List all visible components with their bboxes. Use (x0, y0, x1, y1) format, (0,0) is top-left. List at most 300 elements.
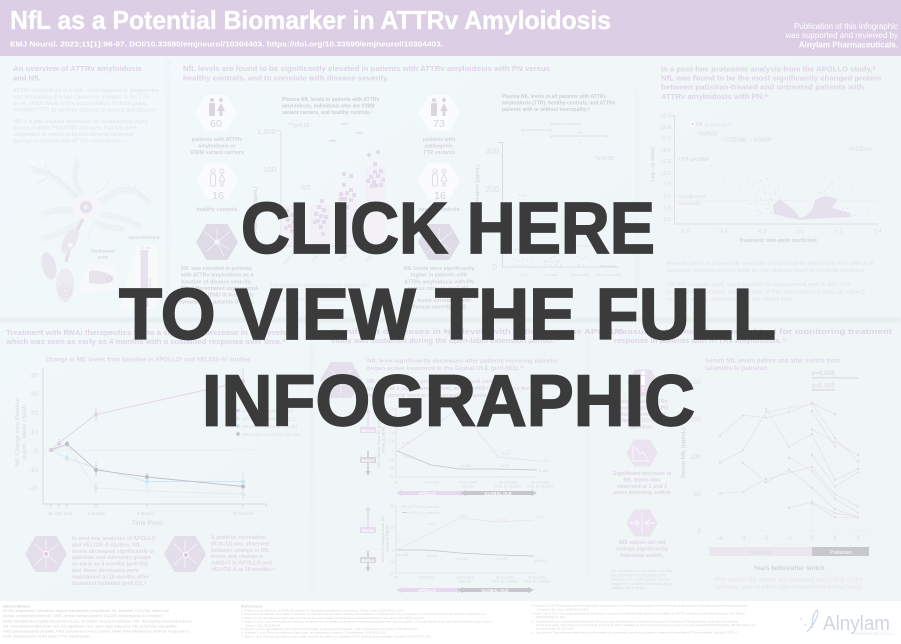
stat: patients who switched: 1 (641, 387, 645, 394)
volcano plot: N-CDase (850, 146, 872, 152)
volcano plot: 0.2 (835, 229, 843, 235)
volcano plot: 12.5 (661, 159, 671, 165)
line chart: NfL change from BL: 42 months (531, 480, 549, 484)
line chart: serum NfL before and after switch: Years before/after switch (753, 566, 825, 572)
stat: patients who switched: amyloidosis with PN (616, 405, 668, 411)
stat: patients who switched: who switched from (617, 412, 667, 418)
text: OLE finding: began active treatment in the Global OLE (p<0.001).¹⁰ (367, 365, 525, 372)
overlay call to action (119, 188, 776, 442)
volcano plot: -Log₁₀ (p value) (650, 147, 656, 183)
scatter chart: plasma NfL by group: 1,000 (257, 127, 276, 136)
line chart: NfL change from baseline: 18 Months (233, 511, 254, 516)
scatter chart: plasma NfL TTR vs controls: TTR (519, 273, 527, 277)
line chart: NfL change from baseline: 30 (31, 391, 38, 398)
text: post-hoc analyses: maintained to 18 months after (72, 574, 150, 580)
scatter chart: plasma NfL by group: 100 (263, 165, 276, 174)
text: post-hoc analyses: and HELIOS-A studies, NfL (72, 542, 142, 548)
line chart: mNIS+7 change from BL: 42 months (528, 576, 546, 580)
panel: monitoring treatment response: tafamidis to patisiran. (705, 365, 769, 372)
panel: RNAi therapeutics: Change in NfL levels from baseline in APOLLO¹ and HELIOS-A² studies (46, 356, 251, 364)
text: limitations: The limitations of this study included (611, 569, 672, 573)
legend: HELIOS-A patisiran (N=36) (242, 424, 298, 429)
neurofilament inset (120, 245, 157, 309)
stat: 60 patients: 60 (210, 118, 222, 130)
references: 5. Gaetani L et al. Neurofilament light chain as a biomarker in neurological disorders. J Neurol Neurosurg Psychiatry. 2019;90:870-81. (241, 627, 418, 631)
line chart: NfL change from baseline: D21 (55, 511, 64, 516)
text: OLE finding: overall clinical burden of neuropathic impairment. (367, 393, 500, 399)
scatter chart: plasma NfL by group: PND II (364, 251, 376, 264)
text: OLE finding (367, 358, 559, 399)
line chart: serum NfL before and after switch: Patisiran (830, 550, 852, 556)
text: NfL elevation finding: symptomatic patients (PND I). (179, 299, 255, 305)
line chart: mNIS+7 change from BL: -10 (388, 560, 394, 564)
text: significantly higher finding: NfL levels correlated with (407, 298, 471, 304)
body text: suggested to reflect active/continuing neuronal (13, 132, 133, 138)
volcano plot: EDA2R (754, 138, 772, 144)
volcano explanation: patisiran treatment over time on the plasma level of multiple proteins. (667, 268, 866, 274)
scatter chart: plasma NfL by group: Control (282, 252, 295, 266)
worse/better arrows top (360, 408, 376, 476)
text: post-hoc analyses: and these decreases were (72, 568, 139, 574)
volcano plot: RSPO3 (699, 132, 717, 138)
line chart: serum NfL before and after switch: 150 (690, 416, 701, 424)
icon: neuron illustration: 10 nm (140, 246, 150, 250)
text: significant decrease: NfL levels was (623, 477, 661, 483)
icon: neuron illustration: Myelinated (91, 248, 115, 254)
icon: neuron hexagon 4 (164, 536, 206, 572)
text: limitations: longer-term studies are necessary to (611, 582, 673, 586)
line chart: mNIS+7 change from BL: -20 (388, 572, 394, 576)
icon: neuron hexagon 2 (418, 224, 460, 260)
text: limitations: validate the findings. (611, 586, 646, 590)
line chart: serum NfL before and after switch: Pre-switch NfL levels are depicted according to the (715, 576, 864, 584)
text: positive correlation: HELIOS-A at 18 months.⁹ (211, 567, 276, 573)
line chart: NfL change from BL: NfL change from BL (pg/mL), (376, 413, 381, 467)
line chart: serum NfL before and after switch: 0 (810, 535, 814, 542)
line chart: serum NfL before and after switch: 100 (690, 454, 701, 461)
volcano plot: Significance (678, 194, 707, 200)
legend: APOLLO-placebo (N=47) (242, 408, 294, 414)
stat: 73 patients (418, 95, 460, 156)
scatter chart: plasma NfL TTR vs controls: * (564, 119, 566, 125)
scatter chart: plasma NfL by group: amyloidosis, individuals who are V30M (282, 104, 375, 110)
chart title: Serum NfL levels before and after switch from (705, 358, 840, 364)
line chart: NfL change from BL: 30 months (499, 480, 517, 484)
abbreviations: mNIS: Modified Neuropathy Impairment Score; N-CDase: neutral ceramidase; NIS: Neuropathy Impairment Score; (3, 619, 193, 623)
text: NfL elevation finding: with ATTRv amyloidosis as a (180, 273, 253, 279)
volcano plot: threshold (678, 201, 700, 207)
references: 7. Maia LF et al. Plasma neurofilament light chain: an early biomarker for hereditary ATTR amyloid polyneuropathy. Amyloid. 2020;27(2):97-102. (241, 634, 432, 638)
line chart: mNIS+7 change from BL: OLE 12 months (492, 580, 518, 584)
line chart: NfL change from BL: n=111 (405, 455, 415, 459)
volcano explanation: and the x-axis demonstrates the effect size. (667, 297, 794, 303)
scatter chart: plasma NfL TTR vs controls (475, 94, 622, 277)
abbreviations: Abbreviations (3, 604, 30, 608)
icon: neuron hexagon 3 (25, 536, 67, 572)
line chart: serum NfL before and after switch: -1 (786, 535, 792, 542)
body text: NfL is a well-studied biomarker for neuroaxonal injury (13, 119, 149, 125)
line chart: serum NfL before and after switch: p=0.001 (812, 382, 835, 390)
line chart: serum NfL before and after switch: Tafamidis (748, 550, 772, 556)
references: J Peripher Nerv Syst. 2019;24(4):314-9. (536, 607, 589, 611)
text: significant decrease: years following switch (613, 490, 671, 496)
heading: Significant decreases in NfL levels with patisiran in the APOLLO (331, 327, 624, 336)
line chart: NfL change from baseline: 4 Months (87, 511, 106, 516)
volcano plot: 20.0 (661, 125, 671, 131)
stat: 16 controls: 16 (434, 190, 446, 202)
heading: NfL levels are found to be significantly elevated in patients with ATTRv amyloidosis with PN versus (183, 64, 550, 73)
stat: 16 healthy controls: healthy controls (197, 207, 238, 213)
stat: patients who switched (616, 370, 668, 431)
scatter chart: plasma NfL TTR vs controls: NS (577, 131, 583, 135)
body text (13, 88, 163, 144)
line chart: NfL change from baseline: 10 (31, 429, 38, 436)
line chart: mNIS+7 change from BL: 40 (390, 504, 394, 508)
text: significant decrease: observed at 1 and 2 (617, 484, 667, 490)
panel: overview of ATTRv amyloidosis (13, 64, 163, 309)
heading: Measuring NfL may be a useful tool for monitoring treatment (614, 327, 893, 336)
volcano plot: 17.5 (661, 136, 671, 142)
references: 6. Thebault S et al. Blood neurofilament light chain: the neurologist's troponin? Biomedicines. 2020;8(11):523. (241, 631, 386, 635)
line chart: NfL change from BL: n=111 (461, 464, 471, 468)
line chart: NfL change from BL: -30 (388, 475, 394, 479)
body text: across multiple PNS/CNS diseases, that has been (13, 126, 138, 132)
logo: Alnylam (800, 610, 893, 636)
volcano plot: CCDC80 (725, 138, 746, 144)
references: 10. Polydefkis M et al. Neurofilament light chain (NfL) as a potential biomarker of treatment response in hereditary ATTR amyloidosis: data from the patisiran (531, 620, 739, 624)
line chart: NfL change from baseline: 0 (34, 448, 38, 455)
line chart: mNIS+7 change from BL: n=141 (427, 554, 438, 558)
text: NIS values: NIS values did not (619, 540, 665, 546)
line chart: serum NfL before and after switch: 1 (833, 535, 837, 542)
abbreviations (3, 604, 193, 639)
references (241, 604, 756, 638)
body text: and debilitating disease caused by variants in the TTR (13, 94, 150, 100)
line chart: serum NfL before and after switch: 50 (694, 491, 701, 498)
line chart: NfL change from BL: OLE 12 months (495, 484, 521, 488)
band arrows top: GLOBAL OLE (484, 491, 512, 496)
line chart: mNIS+7 change from BL: mean (± SEM) (384, 525, 390, 552)
line chart: NfL change from BL: n=67 (402, 441, 411, 445)
line chart: NfL change from BL: BL (395, 480, 399, 484)
line chart: mNIS+7 change from BL: OLE BL (458, 580, 472, 584)
header band (0, 0, 901, 56)
text: post-hoc analyses: as early as 4 months (p<0.05), (72, 562, 149, 568)
text: NfL elevation finding: NfL differentiated asymptomat- (181, 286, 259, 292)
scatter chart: plasma NfL by group: score of 3. (270, 290, 293, 296)
volcano explanation (667, 261, 874, 303)
panel: NfL levels elevated with PN (179, 64, 622, 311)
text: post-hoc analyses: levels decreased significantly in (72, 549, 154, 555)
overlay call to action: CLICK HERE (241, 188, 655, 269)
sponsor note: Publication of this infographic (794, 22, 898, 31)
icon: compress hexagon (626, 510, 658, 536)
worse/better arrows bottom: Better (362, 558, 375, 563)
stat: patients who switched: tafamidis (20 mg) to (617, 418, 668, 424)
text: significantly higher finding: versus controls (p<0.05). (408, 286, 471, 292)
myelinated axon inset (75, 262, 117, 295)
scatter chart: plasma NfL by group: *** (329, 140, 337, 146)
scatter chart: plasma NfL by group: NS (301, 185, 311, 192)
worse/better arrows top: Better (362, 458, 375, 463)
line chart: serum NfL before and after switch: Serum NfL (pg/mL) (681, 428, 687, 478)
scatter chart: plasma NfL by group: PND 0 (310, 250, 322, 264)
scatter chart: plasma NfL TTR vs controls: patients with or without neuropathy.⁸ (502, 107, 591, 113)
line chart: mNIS+7 change from BL: 9 months (419, 576, 435, 580)
worse/better arrows top: Worse (361, 428, 375, 433)
volcano plot: Treatment: time-point coefficient (739, 238, 817, 244)
line chart: mNIS+7 change from BL: APOLLO-placebo (408, 504, 440, 509)
worse/better arrows bottom: Worse (361, 528, 375, 533)
stat: 16 controls (418, 163, 460, 213)
band arrows bottom: APOLLO (418, 588, 436, 593)
heading: In a post-hoc proteomic analysis from the APOLLO study,⁹ (661, 64, 876, 74)
references: Neurol. 2021;20(1):49-59. (246, 623, 281, 627)
references: Last accessed: 20 July 2023. (536, 626, 575, 630)
line chart: NfL change from baseline (15, 368, 301, 527)
volcano plot: 2.5 (664, 206, 671, 212)
line chart: mNIS+7 change from BL: OLE 24 months (524, 580, 550, 584)
scatter chart: plasma NfL TTR vs controls: Controls (544, 273, 558, 277)
panel: proteomic analysis: between patisiran-treated and untreated patients with (661, 82, 864, 92)
line chart: mNIS+7 change from BL: n=51 (458, 514, 467, 518)
line chart: mNIS+7 change from BL: n=39 (498, 518, 507, 522)
volcano plot: 0.0 (664, 217, 671, 223)
line chart: mNIS+7 change from BL: 30 months (496, 576, 514, 580)
line chart: NfL change from baseline: (pg/mL; Mean ±SEM) (22, 404, 28, 460)
scatter chart: plasma NfL TTR vs controls: amyloidosis (TTR), healthy controls, and ATTRv (502, 100, 616, 106)
band arrows top (396, 490, 537, 496)
references: 1. Adams D et al. Patisiran, an RNAi therapeutic, for hereditary transthyretin amyloidosis. N Engl J Med. 2018;379(1):11-21. (241, 608, 405, 612)
line chart: mNIS+7 change from BL (380, 504, 550, 584)
scatter chart: plasma NfL by group: ***p<0.05 (288, 123, 309, 129)
scatter chart: plasma NfL TTR vs controls: Neuropathy (570, 273, 590, 277)
references: global OLE study. AAN Virtual Annual Meeting, 17-22 April, 2021. Available at: https://capella.alnylam.com/wp-content/uploads/2021/04/Polydefkis_NfL-Biomarker.pdf. (536, 623, 756, 627)
line chart: serum NfL before and after switch: 200 (690, 379, 701, 386)
volcano plot: -0.2 (758, 229, 767, 235)
line chart: serum NfL before and after switch (681, 370, 872, 591)
title: NfL as a Potential Biomarker in ATTRv Amyloidosis (10, 5, 611, 35)
scatter chart: plasma NfL by group (253, 97, 385, 303)
scatter chart: plasma NfL by group: PND I (339, 250, 350, 263)
line chart: mNIS+7 change from BL: n=100 (535, 559, 546, 563)
logo: Alnylam: PHARMACEUTICALS (855, 632, 893, 636)
line chart: NfL change from baseline: -20 (28, 485, 38, 492)
line chart: NfL change from BL: n=74 (501, 464, 510, 468)
abbreviations: NfL: neurofilament light chain; NS: not significant; OLE: open-label extension; PN: peripheral neuropathy; (3, 624, 177, 628)
references: 11. Sato M et al. Neurofilament light chain as a biomarker for monitoring response to change in treatment in hereditary ATTR amyloidosis. Amyloid. 2023:1-2. (531, 630, 739, 634)
body text: damage in patients with ATTRv amyloidosis.³˒⁵˒⁶ (13, 138, 131, 144)
line chart: NfL change from BL: n=26 (501, 452, 510, 456)
panel: overview of ATTRv amyloidosis: and NfL (13, 74, 41, 82)
icon: neuron illustration: 60 nm (148, 278, 152, 288)
heading: An overview of ATTRv amyloidosis (13, 64, 142, 73)
abbreviations: domain-containing protein 80; CNS: central nervous system; EDA2R: ectodysplasin A2 receptor; (3, 614, 163, 618)
stat: 60 patients: amyloidosis or (198, 144, 236, 150)
references: 4. Adams D et al. Long-term safety and efficacy of patisiran for hereditary transthyretin-mediated amyloidosis with polyneuropathy: 12-month results of an open-label extension study. Lancet (241, 620, 491, 624)
line chart: serum NfL before and after switch: -3 (740, 535, 746, 542)
stat: 60 patients: V30M variant carriers (190, 150, 244, 156)
line chart: mNIS+7 change from BL: 18 months (456, 576, 474, 580)
panel: NfL levels elevated with PN: healthy controls, and to correlate with disease severity. (183, 74, 389, 82)
scatter chart: plasma NfL TTR vs controls: 0 (493, 263, 498, 272)
text: post-hoc analyses: treatment initiation (p<0.01).⁹ (72, 581, 147, 587)
line chart: NfL change from BL: OLE BL (461, 484, 475, 488)
volcano plot: 5.0 (664, 194, 671, 200)
volcano plot: 15.0 (661, 148, 671, 154)
volcano plot: NT-proBNP (682, 157, 710, 163)
icon: neuron illustration (30, 157, 160, 309)
line chart: mNIS+7 change from BL: n=148 (398, 553, 409, 557)
line chart: NfL change from BL: 30 (390, 407, 394, 411)
text: positive correlation: A positive correlation (211, 535, 266, 541)
text: NfL elevation finding: ic carriers (PND 0) from early (181, 293, 254, 299)
references: 2022;92(S29):S1-S43. (536, 615, 566, 619)
volcano plot: 0.0 (796, 229, 804, 235)
stat: 73 patients: TTR variants (423, 150, 455, 156)
line chart: NfL change from BL: 10 (390, 431, 394, 435)
icon: neuron hexagon (196, 224, 238, 260)
line chart: NfL change from BL (376, 407, 553, 488)
volcano explanation: On the volcano plot, each protein is represented with a dot. The (667, 282, 851, 288)
legend: APOLLO-patisiran (N=111) (242, 416, 297, 421)
line chart: NfL change from BL: 9 months (423, 480, 439, 484)
line chart: NfL change from BL: n=85 (539, 469, 548, 473)
line chart: NfL change from BL: 0 (392, 450, 394, 454)
scatter chart: plasma NfL by group: Plasma NfL (pg/mL) (253, 186, 259, 233)
text: limitations: the small number of patients and (611, 573, 666, 577)
scatter chart: plasma NfL by group: *** (341, 123, 349, 129)
legend: HELIOS-A vutrisiran (N=111) (242, 432, 301, 437)
references: 9. Ando Y et al. 5170. NfL levels significantly decrease in response to treatment with patisiran or vutrisiran in hATTR amyloidosis with polyneuropathy. Ann Neurol. (531, 612, 746, 616)
line chart: serum NfL before and after switch: p=0.008 (812, 370, 835, 377)
overlay call to action: TO VIEW THE FULL (119, 274, 776, 355)
band arrows bottom: GLOBAL OLE (481, 588, 509, 593)
text: NIS values: change significantly (616, 546, 668, 552)
text: limitations: absence of a control group. Further, (611, 578, 671, 582)
volcano plot: 22.5 (661, 114, 671, 120)
volcano plot: 7.5 (664, 182, 671, 188)
scatter chart: plasma NfL TTR vs controls: 200 (486, 185, 500, 194)
icon: neuron illustration: Neurofilament (129, 235, 160, 240)
text: OLE finding: NfL is also a strong predictor of active and continuing (367, 379, 511, 385)
stat: 73 patients: patients with (423, 137, 455, 143)
text: positive correlation: between change in NfL (211, 548, 270, 554)
volcano plot (650, 114, 882, 244)
stat: 16 controls: healthy controls (419, 207, 460, 213)
volcano plot: 0.4 (874, 229, 882, 235)
body text: misfolded TTR as amyloid deposits in organs and tissues.¹⁻⁴ (13, 108, 163, 114)
icon: neuron illustration: axon (98, 254, 109, 260)
stat: 73 patients: 73 (433, 118, 445, 130)
icon: decline hexagon (626, 440, 658, 466)
panel: monitoring treatment response (611, 327, 893, 591)
panel: proteomic analysis: ATTRv amyloidosis with PN.⁹ (661, 92, 768, 101)
line chart: mNIS+7 change from BL: 20 (390, 526, 394, 530)
line chart: mNIS+7 change from BL: n=125 (497, 557, 508, 561)
line chart: NfL change from BL: -10 (388, 458, 394, 462)
line chart: mNIS+7 change from BL: n=67 (427, 522, 436, 526)
text: significantly higher finding: ATTRv amyloidosis with PN (404, 279, 474, 285)
sponsor note: Alnylam Pharmaceuticals. (799, 40, 898, 50)
line chart: mNIS+7 change from BL: BL (395, 576, 399, 580)
line chart: NfL change from BL: mean (± SEM) (380, 426, 386, 453)
heading: Treatment with RNAi therapeutics led to a significant decrease in NfL levels, (6, 328, 289, 337)
line chart: NfL change from BL: -20 (388, 466, 394, 470)
line chart: NfL change from baseline: Time Point (132, 520, 162, 527)
scatter chart: plasma NfL TTR vs controls: 100 (486, 223, 500, 232)
line chart: NfL change from BL: 18 months (459, 480, 477, 484)
line chart: mNIS+7 change from BL: n=77 (398, 539, 407, 543)
stat: 16 healthy controls (196, 163, 238, 213)
stat: 73 patients: pathogenic (425, 144, 453, 150)
sponsor note: was supported and reviewed by (784, 31, 898, 40)
references: 3. Ticau S et al. Neurofilament light chain as a biomarker of hereditary transthyretin-mediated amyloidosis. Neurology. 2021;96(3):e412-22. (241, 616, 425, 620)
text: significant decrease: Significant decrease in (613, 471, 671, 477)
scatter chart: plasma NfL TTR vs controls: Plasma NfL concentration (pg/mL) (475, 164, 481, 246)
panel: RNAi therapeutics (5, 328, 301, 587)
text: positive correlation: levels and change in (211, 554, 264, 560)
citation: EMJ Neurol. 2023;11[1]:96-97. DOI/10.33590/emjneurol/10304403. https://doi.org/10.33590/emjneurol/10304403. (10, 40, 443, 48)
line chart: mNIS+7 change from BL: APOLLO-patisiran (408, 510, 440, 515)
references: 2. Adams D et al. Efficacy and safety of vutrisiran for patients with hereditary transthyretin-mediated amyloidosis with polyneuropathy: a randomized clinical trial. Amyloid. 2023;30(1):1-9. (241, 612, 487, 616)
volcano explanation: Results from a proteomic analysis conducted to determine the effect of (667, 261, 874, 267)
panel: OLE sustained decrease (320, 327, 624, 593)
icon: hexagon (320, 362, 362, 398)
panel: OLE sustained decrease: study was sustained during the open-label extension period.¹⁰ (331, 336, 561, 345)
scatter chart: plasma NfL TTR vs controls: * (535, 125, 537, 131)
text: significantly higher finding: NfL levels were significantly (404, 266, 474, 272)
text: significantly higher finding: disease severity (NIS). (411, 305, 468, 311)
text: post-hoc analyses: In post-hoc analyses of APOLLO (72, 536, 156, 542)
text: NfL elevation finding: function of disease severity. (181, 279, 252, 285)
volcano plot: 10.0 (661, 171, 671, 177)
footer (0, 601, 901, 644)
body text: ATTRv amyloidosis is a rare, underdiagnosed, progressive (13, 88, 159, 94)
scatter chart: plasma NfL TTR vs controls: *p<0.05 (595, 156, 614, 162)
overlay call to action: INFOGRAPHIC (202, 360, 695, 442)
scatter chart: plasma NfL by group: Data are presented as group mean ±SD. (270, 297, 360, 303)
line chart: serum NfL before and after switch: -4 (717, 535, 723, 542)
references: 8. Kapoor M et al. Plasma neurofilament light chain concentration is increased and correlates with the severity of neuropathy in hereditary transthyretin amyloidosis. (531, 604, 748, 608)
line chart: mNIS+7 change from BL: n=137 (457, 557, 468, 561)
text: positive correlation: mNIS+7 in APOLLO and (211, 561, 272, 567)
stat: 60 patients (190, 95, 244, 156)
line chart: serum NfL before and after switch: 2 (856, 535, 860, 542)
line chart: NfL change from baseline: 20 (31, 410, 38, 417)
references: References (241, 604, 263, 608)
stat: patients who switched: patisiran. (630, 425, 654, 431)
line chart: NfL change from baseline: NfL Change from Baseline (15, 398, 21, 466)
scatter chart: plasma NfL by group: Plasma NfL levels in patients with ATTRv (282, 97, 379, 103)
stat: 16 healthy controls: 16 (212, 190, 224, 202)
line chart: NfL change from BL: 20 (390, 419, 394, 423)
scatter chart: plasma NfL by group: Full diamonds represent patients with a PND (270, 283, 369, 289)
volcano plot: NfL (p=3.95×10⁻²¹) (696, 122, 732, 128)
line chart: NfL change from baseline: D43 (64, 511, 73, 516)
scatter chart: plasma NfL by group: *** (356, 132, 364, 138)
panel: proteomic analysis (650, 64, 882, 303)
text: post-hoc analyses: patisiran and vutrisiran groups (72, 555, 151, 561)
text: NfL elevation finding: NfL was elevated in patients (181, 266, 252, 272)
line chart: NfL change from BL: 10 (390, 439, 394, 443)
line chart: NfL change from BL: n=19 (540, 459, 549, 463)
panel: proteomic analysis: NfL was found to be the most significantly changed protein (661, 74, 881, 82)
band arrows top: APOLLO (418, 491, 436, 496)
stat: patients who switched: patients with ATTRv (616, 399, 668, 405)
scatter chart: plasma NfL TTR vs controls: 300 (486, 147, 500, 156)
scatter chart: plasma NfL TTR vs controls: Plasma NfL levels in all patients with ATTRv (502, 94, 606, 100)
